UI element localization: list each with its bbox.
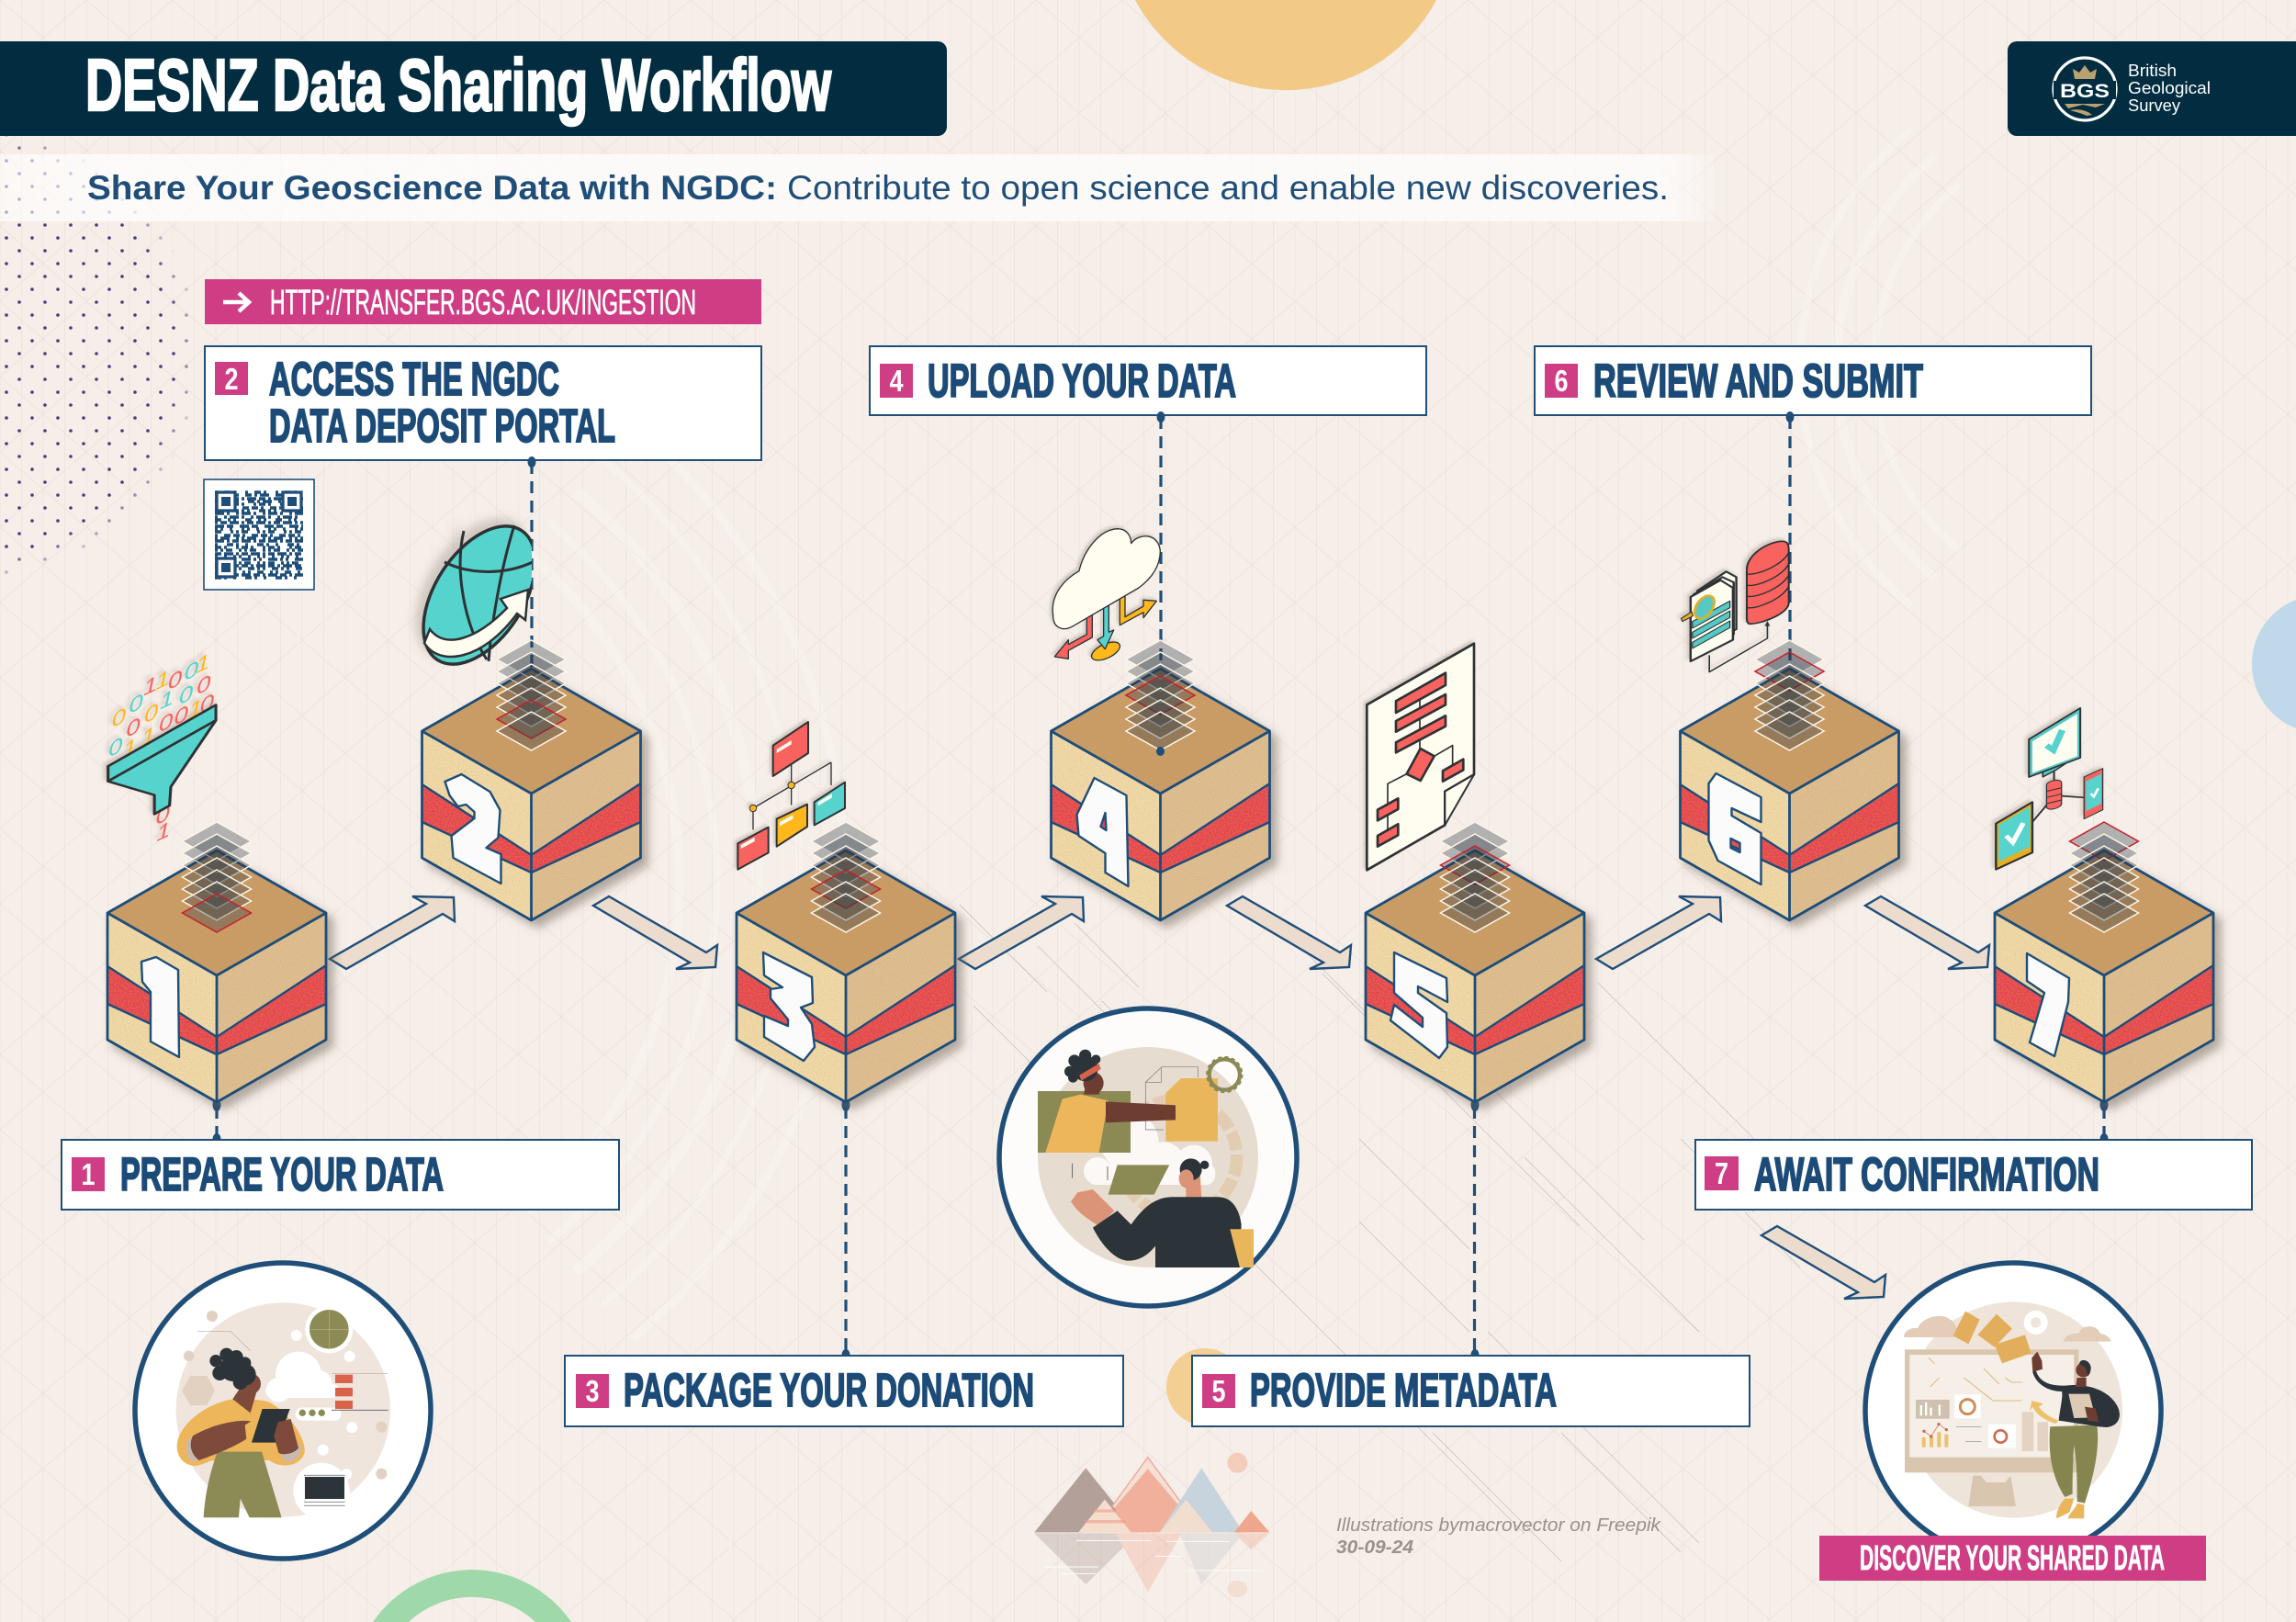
icon: funnel with binary digits [108,648,216,846]
illustration: two people exchanging documents [999,1008,1297,1306]
step 3 label: 3 [586,1374,599,1408]
icon: funnel with binary digits: 1 [155,665,170,694]
step 7 label [1695,1140,2252,1210]
step 2 label [205,346,761,460]
icon: funnel with binary digits: 0 [168,665,182,694]
dot pattern, top left [5,136,188,574]
icon: funnel with binary digits: 1 [160,685,174,715]
icon: funnel with binary digits: 1 [123,734,137,763]
icon: funnel with binary digits: 1 [141,722,155,751]
icon: flowchart document [1367,644,1474,870]
BGS logo panel: Geological [2128,79,2211,97]
step 5 label: PROVIDE METADATA [1250,1364,1557,1416]
BGS logo panel: Survey [2128,96,2180,115]
cube 5 [1366,822,1584,1102]
icon: funnel with binary digits: 0 [155,800,170,829]
step 4 label [870,346,1426,415]
icon: devices with check marks [1996,708,2103,870]
step 4 label: 4 [889,364,904,398]
connector dashes [213,411,2109,1360]
icon: funnel with binary digits: 0 [126,713,141,742]
title bar [0,41,947,136]
icon: funnel with binary digits: 0 [112,703,126,732]
icon: funnel with binary digits: 0 [144,699,158,728]
QR code [204,479,314,590]
step 5 label: 5 [1212,1374,1225,1408]
step 6 label [1535,346,2091,415]
decorative yellow circle, top [1135,0,1436,90]
subtitle band: Contribute to open science and enable new discoveries. [787,169,1669,207]
subtitle band: Share Your Geoscience Data with NGDC: [87,169,777,207]
icon: funnel with binary digits: 0 [174,701,188,730]
cube 7 [1995,822,2213,1102]
step 6 label: REVIEW AND SUBMIT [1593,355,1923,407]
step 2 label: ACCESS THE NGDC [269,353,559,405]
icon: cloud with arrows [1052,529,1160,664]
decorative blue circle, right edge [2252,600,2296,728]
icon: globe with arrow [411,514,532,666]
mountain logo [1034,1453,1269,1597]
credit text: Illustrations bymacrovector on Freepik [1336,1515,1661,1536]
step 2 label: 2 [224,362,239,396]
step 3 label [565,1356,1123,1426]
cube 2 [422,640,641,920]
icon: funnel with binary digits: 1 [196,648,209,679]
credit text [1336,1515,1661,1558]
step 3 label: PACKAGE YOUR DONATION [624,1364,1034,1416]
BGS logo panel [2008,41,2296,136]
step 5 label [1192,1356,1750,1426]
icon: folder tree [737,722,845,870]
icon: funnel with binary digits: 0 [179,680,193,709]
icon: funnel with binary digits: 0 [185,656,198,685]
step 1 label [62,1140,619,1210]
step 1 label: PREPARE YOUR DATA [120,1148,444,1200]
credit text: 30-09-24 [1336,1538,1413,1558]
step 7 label: AWAIT CONFIRMATION [1754,1148,2099,1200]
icon: funnel with binary digits: 0 [159,708,174,738]
BGS logo panel: British [2128,62,2177,80]
icon: funnel with binary digits: 0 [129,689,143,718]
icon: documents and database [1682,541,1789,672]
icon: funnel with binary digits: 0 [200,689,214,718]
decorative green ring, bottom [373,1570,571,1622]
URL bar [205,279,761,324]
icon: funnel with binary digits: 1 [156,817,171,846]
step 2 label: DATA DEPOSIT PORTAL [269,400,615,452]
step 6 label: 6 [1554,364,1569,398]
illustration: person with monitor [1865,1263,2161,1559]
illustration: person with tablet [135,1263,431,1559]
icon: funnel with binary digits: 1 [188,694,202,724]
cube 3 [737,822,955,1102]
diagonal hairlines [960,905,1800,1561]
icon: funnel with binary digits: 1 [143,671,157,701]
step 1 label: 1 [81,1157,96,1191]
title: DESNZ Data Sharing Workflow [85,44,832,126]
BGS logo panel: BGS [2060,81,2110,102]
cube 6 [1681,640,1899,920]
step 7 label: 7 [1715,1156,1728,1190]
subtitle band [0,154,1714,221]
discover callout [1819,1536,2206,1581]
step 4 label: UPLOAD YOUR DATA [928,355,1236,407]
icon: funnel with binary digits: 0 [108,732,123,762]
icon: funnel with binary digits: 0 [197,670,211,700]
URL bar: HTTP://TRANSFER.BGS.AC.UK/INGESTION [270,284,696,322]
decorative yellow circle behind step 5 [1166,1348,1244,1425]
flow arrows [330,896,1989,1299]
cube 1 [107,822,326,1102]
cube 4 [1051,640,1269,920]
